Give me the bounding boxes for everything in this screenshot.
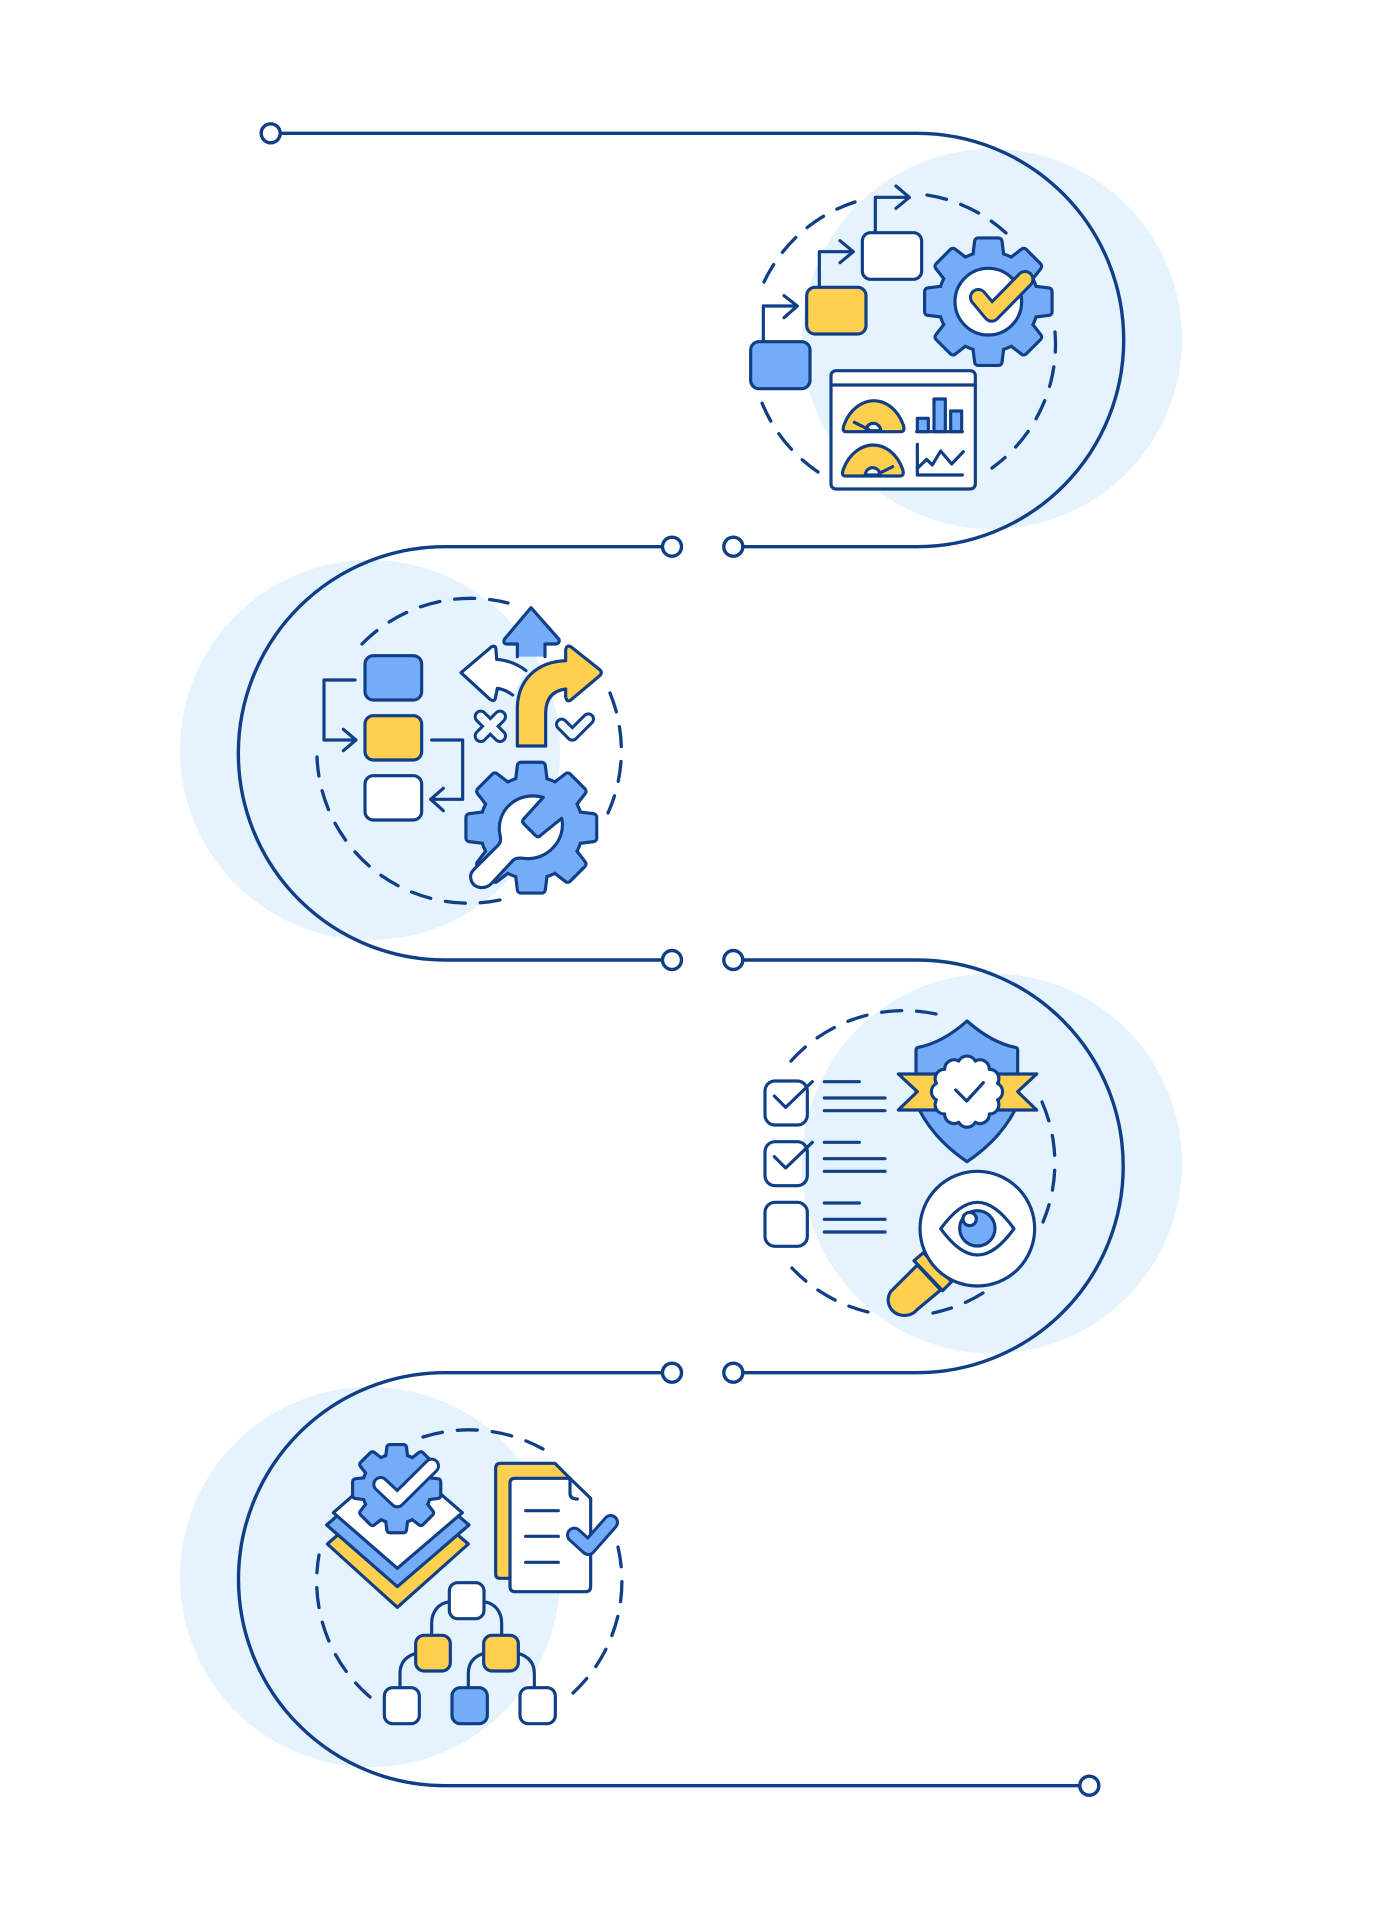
panel: step 2 icon, flow boxes, route arrows and wrench gear bbox=[317, 598, 621, 903]
gear with wrench bbox=[470, 766, 593, 889]
icon drawing bbox=[324, 608, 601, 889]
dashed ring bbox=[762, 195, 1056, 472]
yellow turn arrow bbox=[517, 646, 601, 746]
hierarchy connectors bbox=[400, 1602, 534, 1688]
segment: step 4 arc bbox=[239, 1373, 1079, 1786]
workflow arrows bbox=[763, 186, 909, 340]
dashed ring bbox=[791, 1011, 1055, 1313]
badge with check bbox=[931, 1056, 1003, 1127]
ribbon bbox=[898, 1074, 1037, 1110]
dashboard window bbox=[831, 371, 975, 489]
icon drawing bbox=[751, 186, 1048, 489]
panel: step 1 icon, workflow, gear and dashboard bbox=[751, 186, 1056, 489]
up arrow bbox=[504, 608, 559, 657]
icon drawing bbox=[327, 1447, 611, 1724]
icon drawing bbox=[765, 1021, 1037, 1315]
flow boxes bbox=[365, 656, 422, 820]
dashed ring bbox=[317, 598, 621, 903]
stacked layers bbox=[327, 1457, 469, 1607]
check mark bbox=[562, 719, 588, 735]
shield bbox=[916, 1021, 1018, 1162]
segment: step 1 arc bbox=[281, 133, 1124, 547]
blue check bbox=[574, 1522, 611, 1548]
gear with check bbox=[355, 1447, 438, 1530]
left arrow bbox=[461, 646, 526, 701]
cross mark bbox=[481, 717, 500, 736]
eye bbox=[941, 1202, 1014, 1255]
flow connectors bbox=[324, 680, 463, 811]
terminal nodes bbox=[261, 124, 1099, 1795]
segment: step 2 arc bbox=[238, 547, 662, 960]
timeline connector bbox=[238, 124, 1124, 1795]
workflow boxes bbox=[751, 233, 922, 389]
gear with check bbox=[928, 241, 1048, 362]
segment: step 3 arc bbox=[743, 960, 1123, 1373]
panel: step 3 icon, checklist, shield and magnifier bbox=[765, 1011, 1055, 1315]
checklist bbox=[765, 1081, 885, 1246]
light blue background circles bbox=[180, 149, 1182, 1767]
hierarchy nodes bbox=[384, 1583, 555, 1724]
documents bbox=[496, 1463, 591, 1592]
dashed ring bbox=[317, 1430, 622, 1697]
panel: step 4 icon, layers, documents and hierarchy bbox=[317, 1430, 622, 1724]
magnifier bbox=[888, 1171, 1035, 1315]
